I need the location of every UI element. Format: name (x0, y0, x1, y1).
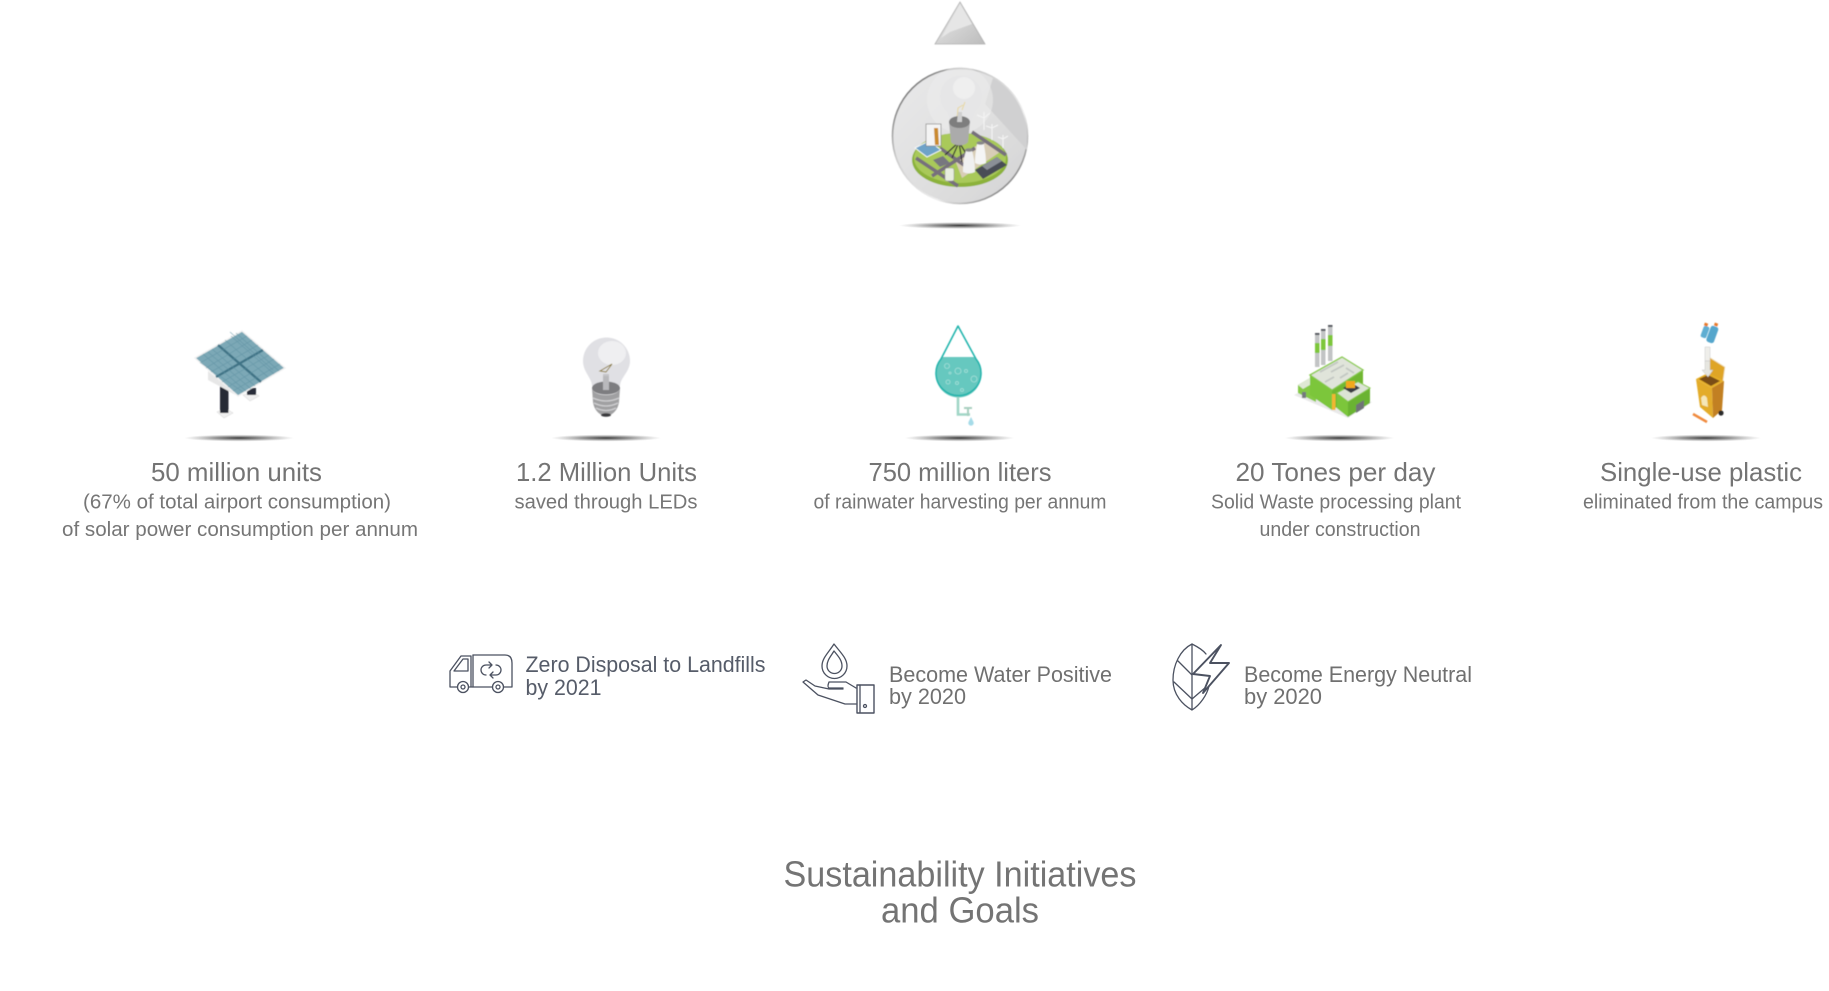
stat heading: Single-use plastic (1600, 457, 1802, 487)
goal text: Become Water Positive (889, 662, 1112, 687)
icon: leaf with lightning bolt (1173, 644, 1229, 710)
icon: water drop with faucet (936, 326, 981, 426)
panel: single-use plastic (1583, 323, 1823, 514)
goal: water positive (803, 644, 1112, 713)
panel: rainwater (814, 326, 1106, 514)
stat heading: 1.2 Million Units (516, 457, 697, 487)
goal: energy neutral (1173, 644, 1472, 710)
title (784, 854, 1136, 930)
panel: solar power (62, 331, 418, 541)
stat description line 2: of solar power consumption per annum (62, 519, 418, 541)
goal text: Become Energy Neutral (1244, 662, 1472, 687)
goal year: by 2021 (526, 675, 602, 700)
panel: solid waste (1211, 325, 1461, 541)
stat description line 2: under construction (1260, 519, 1420, 541)
shadow (1651, 434, 1761, 442)
goal text: Zero Disposal to Landfills (526, 652, 766, 677)
goal year: by 2020 (1244, 684, 1322, 709)
shadow (184, 434, 294, 442)
shadow (904, 434, 1014, 442)
stat description: saved through LEDs (514, 492, 698, 514)
stat description line 1: Solid Waste processing plant (1211, 492, 1461, 514)
icon: solar panel (195, 331, 285, 418)
shadow (1284, 434, 1394, 442)
shadow: central globe (899, 222, 1021, 229)
stat description line 1: (67% of total airport consumption) (83, 492, 391, 514)
stat heading: 20 Tones per day (1236, 457, 1436, 487)
shadow (551, 434, 661, 442)
panel: LEDs (514, 338, 698, 514)
icon: factory (1294, 325, 1372, 418)
icon: hand holding water drop (803, 644, 874, 713)
stat heading: 750 million liters (868, 457, 1052, 487)
stat description: eliminated from the campus (1583, 492, 1823, 514)
icon: top triangle (935, 2, 985, 44)
stat heading: 50 million units (151, 457, 322, 487)
stat description: of rainwater harvesting per annum (814, 492, 1106, 514)
icon: recycling truck (450, 655, 512, 692)
title: and Goals (881, 890, 1039, 930)
icon: central globe with energy campus (892, 67, 1028, 204)
goal year: by 2020 (889, 684, 966, 709)
icon: plastic bin with bottles (1693, 323, 1725, 422)
icon: light bulb (583, 338, 630, 417)
title: Sustainability Initiatives (784, 854, 1136, 894)
goal: zero disposal to landfills (450, 652, 766, 700)
